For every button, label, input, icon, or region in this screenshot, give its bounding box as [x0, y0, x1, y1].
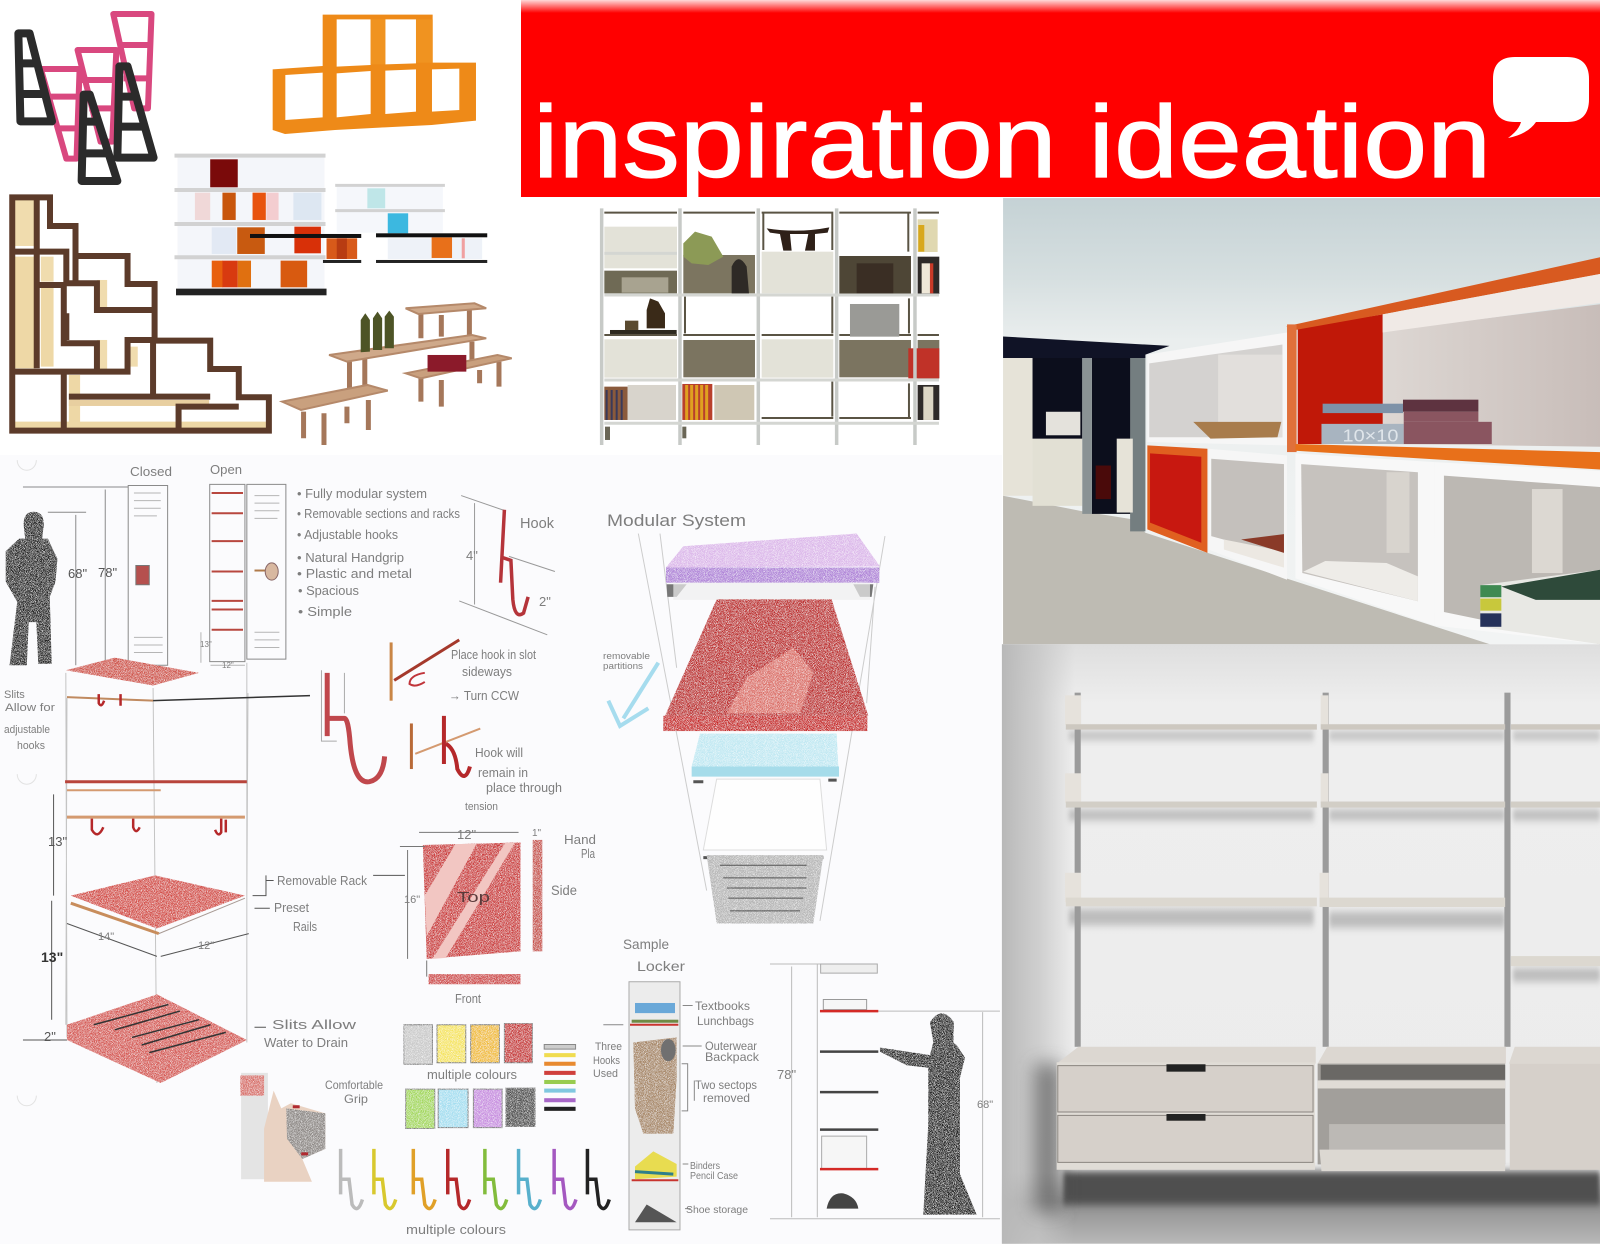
drawing: colour swatches: [404, 1023, 535, 1129]
handwritten notes: remain in: [478, 765, 528, 780]
handwritten notes: Lunchbags: [697, 1014, 754, 1028]
handwritten notes: Rails: [293, 919, 317, 934]
handwritten notes: Closed: [130, 464, 172, 479]
handwritten notes: Slits: [4, 689, 25, 701]
handwritten notes: • Removable sections and racks: [297, 506, 460, 521]
handwritten notes: Two sectops: [695, 1078, 757, 1092]
books: [604, 219, 939, 420]
handwritten notes: Hooks: [593, 1055, 620, 1067]
drawing: sample locker contents: [603, 982, 702, 1230]
handwritten notes: Textbooks: [695, 999, 750, 1013]
lower white cubes: [1295, 453, 1600, 644]
handwritten notes: → Turn CCW: [449, 688, 520, 703]
handwritten notes: partitions: [603, 661, 644, 671]
handwritten notes: Used: [593, 1068, 618, 1080]
shelves column two: [1320, 695, 1505, 907]
sketch: left-hand locker concept drawings: [6, 460, 609, 1209]
handwritten notes: Front: [455, 991, 481, 1006]
handwritten notes: adjustable: [4, 724, 50, 736]
stacked magazines: [1480, 570, 1600, 644]
handwritten notes: Hook: [520, 515, 554, 532]
orange framed long shelf: [1286, 257, 1600, 470]
image: small acrylic colour shelf: [250, 185, 487, 263]
image: wooden bench shelves with bottles: [282, 303, 512, 445]
handwritten notes: 78": [777, 1067, 796, 1082]
handwritten notes: tension: [465, 801, 498, 813]
handwritten notes: 12": [457, 827, 476, 842]
handwritten notes: Pencil Case: [690, 1171, 738, 1182]
image: orange cube shelf: [273, 15, 476, 134]
handwritten notes: Modular System: [607, 511, 746, 530]
handwritten notes: [4, 462, 993, 1237]
drawing: hook details: [321, 496, 555, 782]
middle open compartment: [1318, 1047, 1506, 1171]
handwritten notes: 13": [41, 949, 63, 965]
handwritten notes: Water to Drain: [264, 1035, 348, 1050]
handwritten notes: Pla: [581, 846, 596, 861]
red and white lower cubes: [1147, 445, 1287, 580]
handwritten notes: Three: [595, 1041, 622, 1053]
objects on shelves: [610, 227, 899, 337]
handwritten notes: multiple colours: [427, 1067, 517, 1082]
drawing: person silhouette: [6, 512, 57, 665]
title banner: [521, 0, 1600, 199]
handwritten notes: 1": [532, 828, 542, 839]
stacked books: 10×10: [1343, 425, 1398, 445]
handwritten notes: Shoe storage: [686, 1205, 748, 1216]
handwritten notes: • Plastic and metal: [297, 566, 412, 581]
drawing: modular shelf stack: [663, 534, 880, 923]
handwritten notes: 2": [44, 1029, 56, 1044]
image: white bookcase with cream panels: [600, 208, 942, 447]
arrow: removable partitions pointer: [608, 663, 658, 726]
panel: inspiration furniture collage: [12, 14, 942, 447]
handwritten notes: Locker: [637, 958, 685, 974]
handwritten notes: • Spacious: [298, 583, 359, 598]
handwritten notes: Hook will: [475, 745, 523, 760]
handwritten notes: Removable Rack: [277, 873, 367, 888]
taupe panels: [604, 255, 939, 378]
shelves column one: [1065, 695, 1317, 906]
handwritten notes: Top: [457, 889, 490, 906]
handwritten notes: Binders: [690, 1161, 720, 1172]
handwritten notes: Sample: [623, 936, 669, 952]
handwritten notes: Hand: [564, 832, 596, 847]
drawing: hand grip: [240, 1073, 325, 1182]
handwritten notes: multiple colours: [406, 1222, 507, 1237]
image: tetris wooden shelf: [12, 197, 269, 431]
handwritten notes: • Simple: [298, 604, 352, 619]
handwritten notes: Preset: [274, 900, 309, 915]
icon: speech bubble: [1493, 57, 1589, 138]
drawing: perspective guide lines: [638, 534, 885, 921]
handwritten notes: • Fully modular system: [297, 486, 427, 501]
handwritten notes: • Adjustable hooks: [297, 527, 398, 542]
handwritten notes: hooks: [17, 740, 45, 752]
handwritten notes: place through: [486, 780, 562, 795]
sketch: modular system and sample locker drawings: [603, 534, 1000, 1230]
drawing: closed and open locker: [23, 484, 286, 665]
handwritten notes: Allow for: [5, 702, 55, 714]
handwritten notes: 2": [539, 594, 551, 609]
handwritten notes: 78": [98, 565, 117, 580]
panel: pencil sketch sheet: [0, 455, 1002, 1244]
handwritten notes: Place hook in slot: [451, 647, 536, 662]
photo: wall mounted modular shelving: [1002, 644, 1600, 1244]
vertical wall rails: [1075, 693, 1511, 1047]
handwritten notes: • Natural Handgrip: [297, 550, 404, 565]
drawing: figure beside shelves: [770, 964, 1000, 1219]
handwritten notes: 13": [48, 834, 67, 849]
right drawer cabinet: [1509, 1047, 1600, 1170]
handwritten notes: 4": [466, 548, 478, 563]
handwritten notes: removable: [603, 651, 650, 661]
drawing: red rack top, side and front: [400, 832, 542, 984]
handwritten notes: 16": [404, 894, 420, 906]
image: tall acrylic colour shelf: [174, 156, 327, 295]
drawing: multi-colour hooks: [341, 1149, 609, 1209]
cream panels: [604, 227, 833, 378]
drawing: perspective locker frame: [23, 658, 405, 1083]
handwritten notes: Grip: [344, 1092, 368, 1106]
handwritten notes: 12": [198, 940, 214, 952]
photo: white and orange cube storage: [1003, 198, 1600, 644]
drawing: colour stripes: [544, 1045, 576, 1111]
handwritten notes: Open: [210, 462, 242, 477]
uprights: [602, 208, 915, 445]
handwritten notes: Side: [551, 882, 577, 898]
handwritten notes: Slits Allow: [272, 1017, 357, 1032]
stacked books: [1321, 400, 1492, 445]
handwritten notes: 14": [98, 931, 114, 943]
left drawer cabinet: [1057, 1047, 1316, 1170]
handwritten notes: Outerwear: [705, 1039, 757, 1053]
handwritten notes: Backpack: [705, 1050, 760, 1064]
title text: inspiration ideation: [533, 85, 1491, 199]
handwritten notes: sideways: [462, 664, 512, 679]
handwritten notes: 68": [977, 1099, 993, 1111]
handwritten notes: 12": [222, 661, 234, 670]
handwritten notes: Comfortable: [325, 1078, 383, 1092]
carpet floor: [1003, 496, 1490, 644]
handwritten notes: 68": [68, 566, 87, 581]
handwritten notes: 13": [200, 640, 212, 649]
back room: [1003, 336, 1170, 531]
cabinet shadow: [1034, 1064, 1600, 1211]
shelf shadows: [1069, 732, 1600, 982]
image: pink and black trapezoid shelves: [18, 14, 154, 181]
shelves column three: [1511, 724, 1600, 966]
left upper white cube: [1147, 332, 1287, 445]
handwritten notes: removed: [703, 1091, 750, 1105]
dark frame edges: [604, 213, 939, 418]
